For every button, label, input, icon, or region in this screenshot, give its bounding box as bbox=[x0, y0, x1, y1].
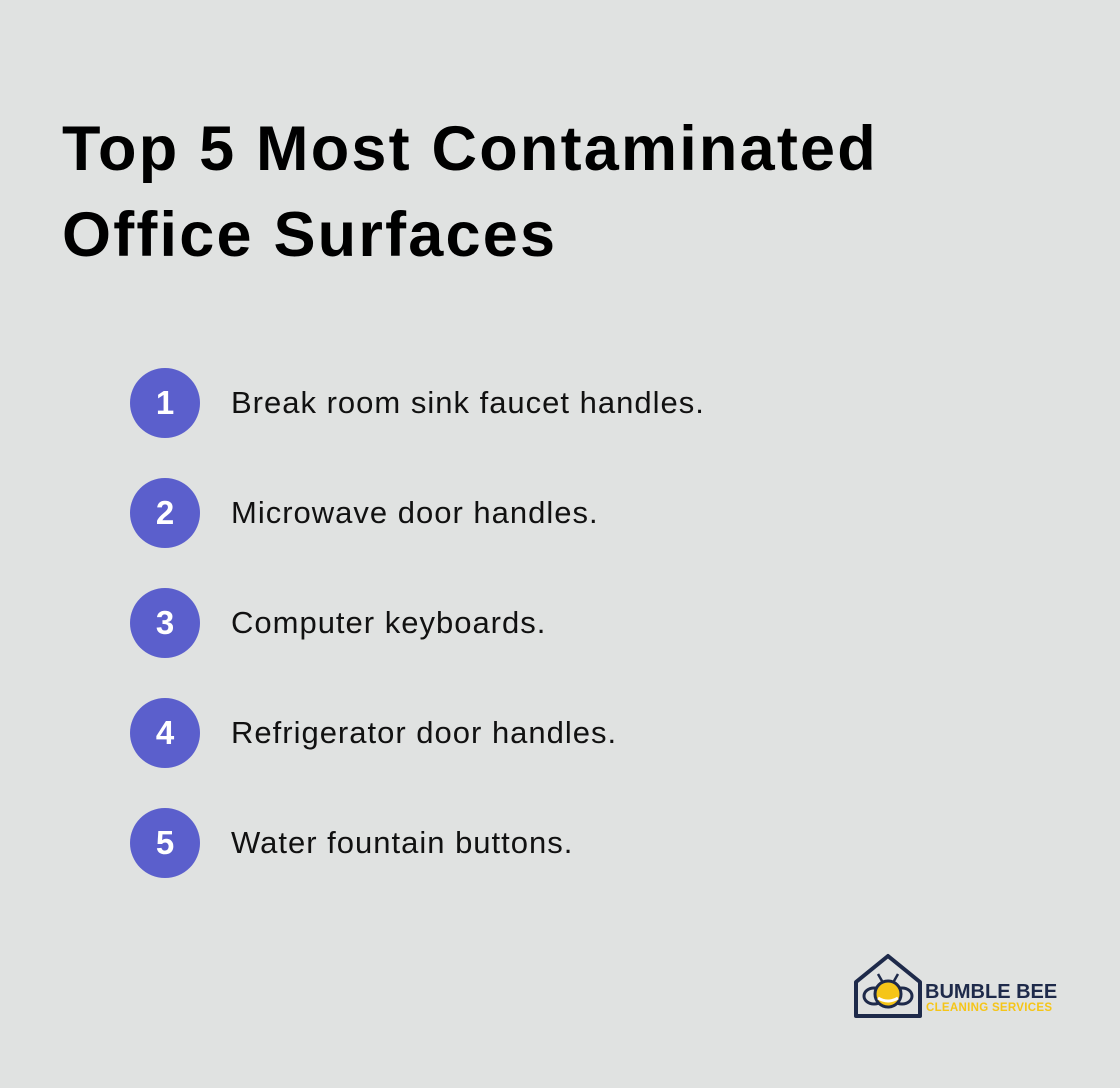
list item 4: 4 bbox=[156, 714, 174, 751]
title: Office Surfaces bbox=[62, 200, 557, 270]
list item 1: 1 bbox=[156, 384, 174, 421]
list item 2: Microwave door handles. bbox=[231, 495, 599, 530]
list item 3: Computer keyboards. bbox=[231, 605, 546, 640]
list item 1 bbox=[130, 368, 705, 438]
list item 1: Break room sink faucet handles. bbox=[231, 385, 705, 420]
list item 4 bbox=[130, 698, 617, 768]
list item 2 bbox=[130, 478, 599, 548]
list item 4: Refrigerator door handles. bbox=[231, 715, 617, 750]
logo: CLEANING SERVICES bbox=[926, 1002, 1052, 1014]
brand text: BUMBLE BEE bbox=[925, 981, 1057, 1003]
icon: bee house bbox=[854, 954, 922, 1018]
list item 3: 3 bbox=[156, 604, 174, 641]
title: Top 5 Most Contaminated bbox=[62, 114, 878, 184]
logo bbox=[854, 954, 1057, 1018]
list item 2: 2 bbox=[156, 494, 174, 531]
list item 3 bbox=[130, 588, 546, 658]
title bbox=[62, 114, 878, 270]
list item 5 bbox=[130, 808, 573, 878]
list item 5: 5 bbox=[156, 824, 174, 861]
list item 5: Water fountain buttons. bbox=[231, 825, 573, 860]
